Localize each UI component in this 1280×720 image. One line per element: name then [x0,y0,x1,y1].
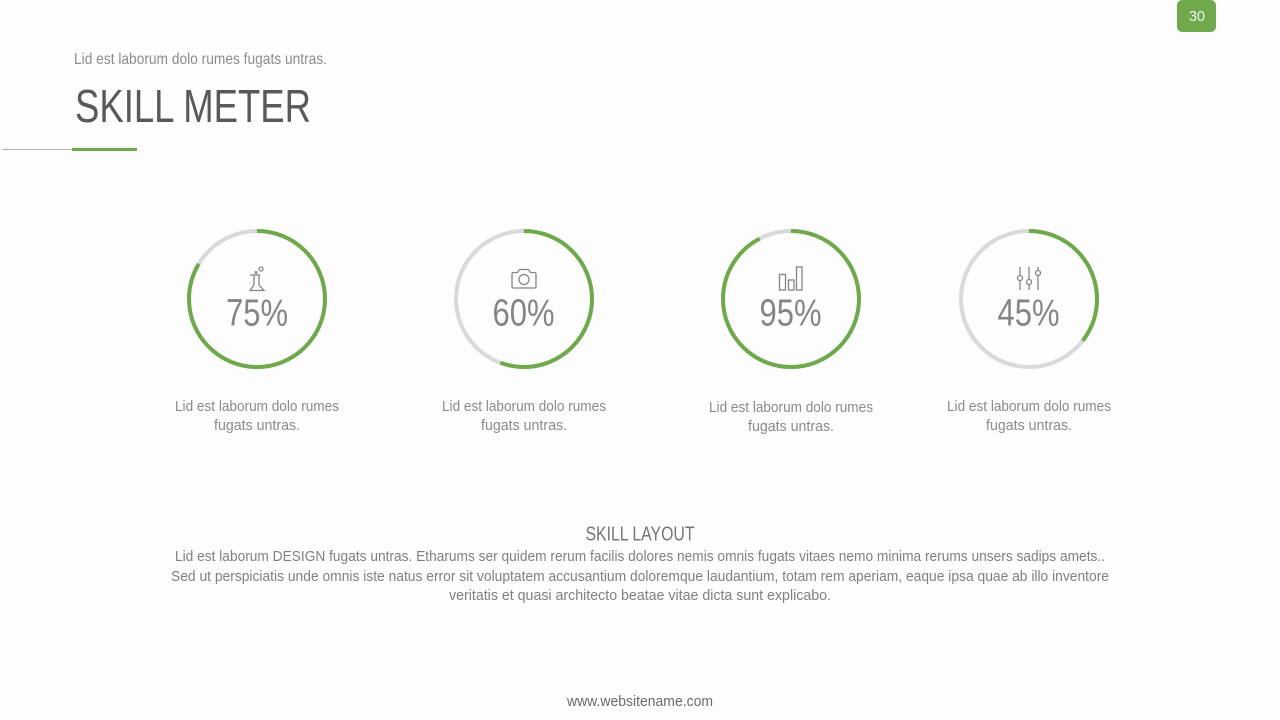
caption [175,398,339,434]
ring: 75% [189,231,325,367]
footer website: www.websitename.com [566,693,713,710]
meter: 95% [709,231,873,435]
ring: 95% [723,231,859,367]
icon: camera [512,270,536,288]
caption [442,398,606,434]
ring: 60% [456,231,592,367]
icon: sliders [1018,267,1040,290]
meter: 75% [175,231,339,434]
value: 60%: 60% [492,292,554,334]
page number badge: 30 [1189,8,1205,25]
title underline [2,148,137,151]
body paragraph: veritatis et quasi architecto beatae vitae dicta sunt explicabo. [449,587,831,604]
ring: 45% [961,231,1097,367]
value: 45%: 45% [998,292,1060,334]
caption [709,399,873,435]
caption: Lid est laborum dolo rumes [442,398,606,415]
title: SKILL METER [75,80,311,132]
icon: bar chart [780,267,802,290]
caption: Lid est laborum dolo rumes [947,398,1111,415]
meter: 60% [442,231,606,434]
caption [947,398,1111,434]
page number badge [1177,0,1216,32]
body paragraph: Lid est laborum DESIGN fugats untras. Etharums ser quidem rerum facilis dolores nemis omnis fugats vitaes nemo minima rerums unsers sadips amets.. [175,548,1105,565]
body paragraph: Sed ut perspiciatis unde omnis iste natus error sit voluptatem accusantium doloremque laudantium, totam rem aperiam, eaque ipsa quae ab illo inventore [171,568,1109,585]
body paragraph [171,548,1109,604]
caption: fugats untras. [214,417,300,434]
value: 95%: 95% [760,292,822,334]
caption: Lid est laborum dolo rumes [709,399,873,416]
subtitle: Lid est laborum dolo rumes fugats untras. [74,51,327,68]
icon: flask [250,267,264,290]
meter: 45% [947,231,1111,434]
caption: Lid est laborum dolo rumes [175,398,339,415]
caption: fugats untras. [748,418,834,435]
value: 75%: 75% [226,292,288,334]
caption: fugats untras. [986,417,1072,434]
section heading: SKILL LAYOUT [586,524,694,546]
caption: fugats untras. [481,417,567,434]
